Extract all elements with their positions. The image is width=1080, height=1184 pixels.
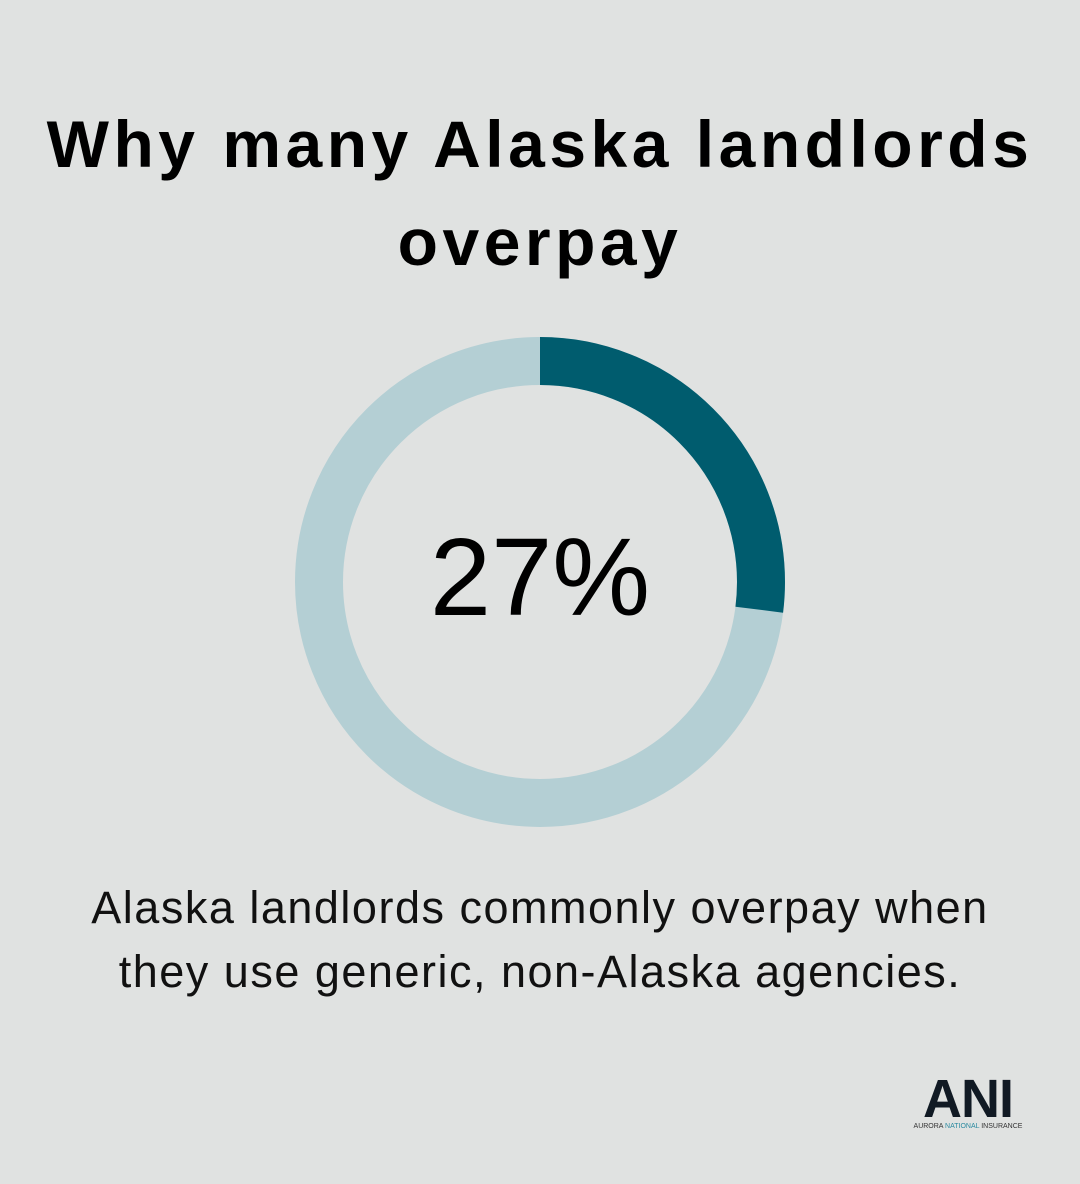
logo: AURORA NATIONAL INSURANCE	[914, 1123, 1022, 1130]
description text: Alaska landlords commonly overpay when	[91, 882, 989, 933]
title: overpay	[398, 205, 682, 279]
description text: they use generic, non-Alaska agencies.	[119, 946, 961, 997]
donut chart: 27%	[430, 516, 650, 639]
description text	[91, 882, 989, 997]
logo: ANI	[923, 1069, 1013, 1129]
title	[46, 107, 1033, 279]
title: Why many Alaska landlords	[47, 107, 1033, 181]
